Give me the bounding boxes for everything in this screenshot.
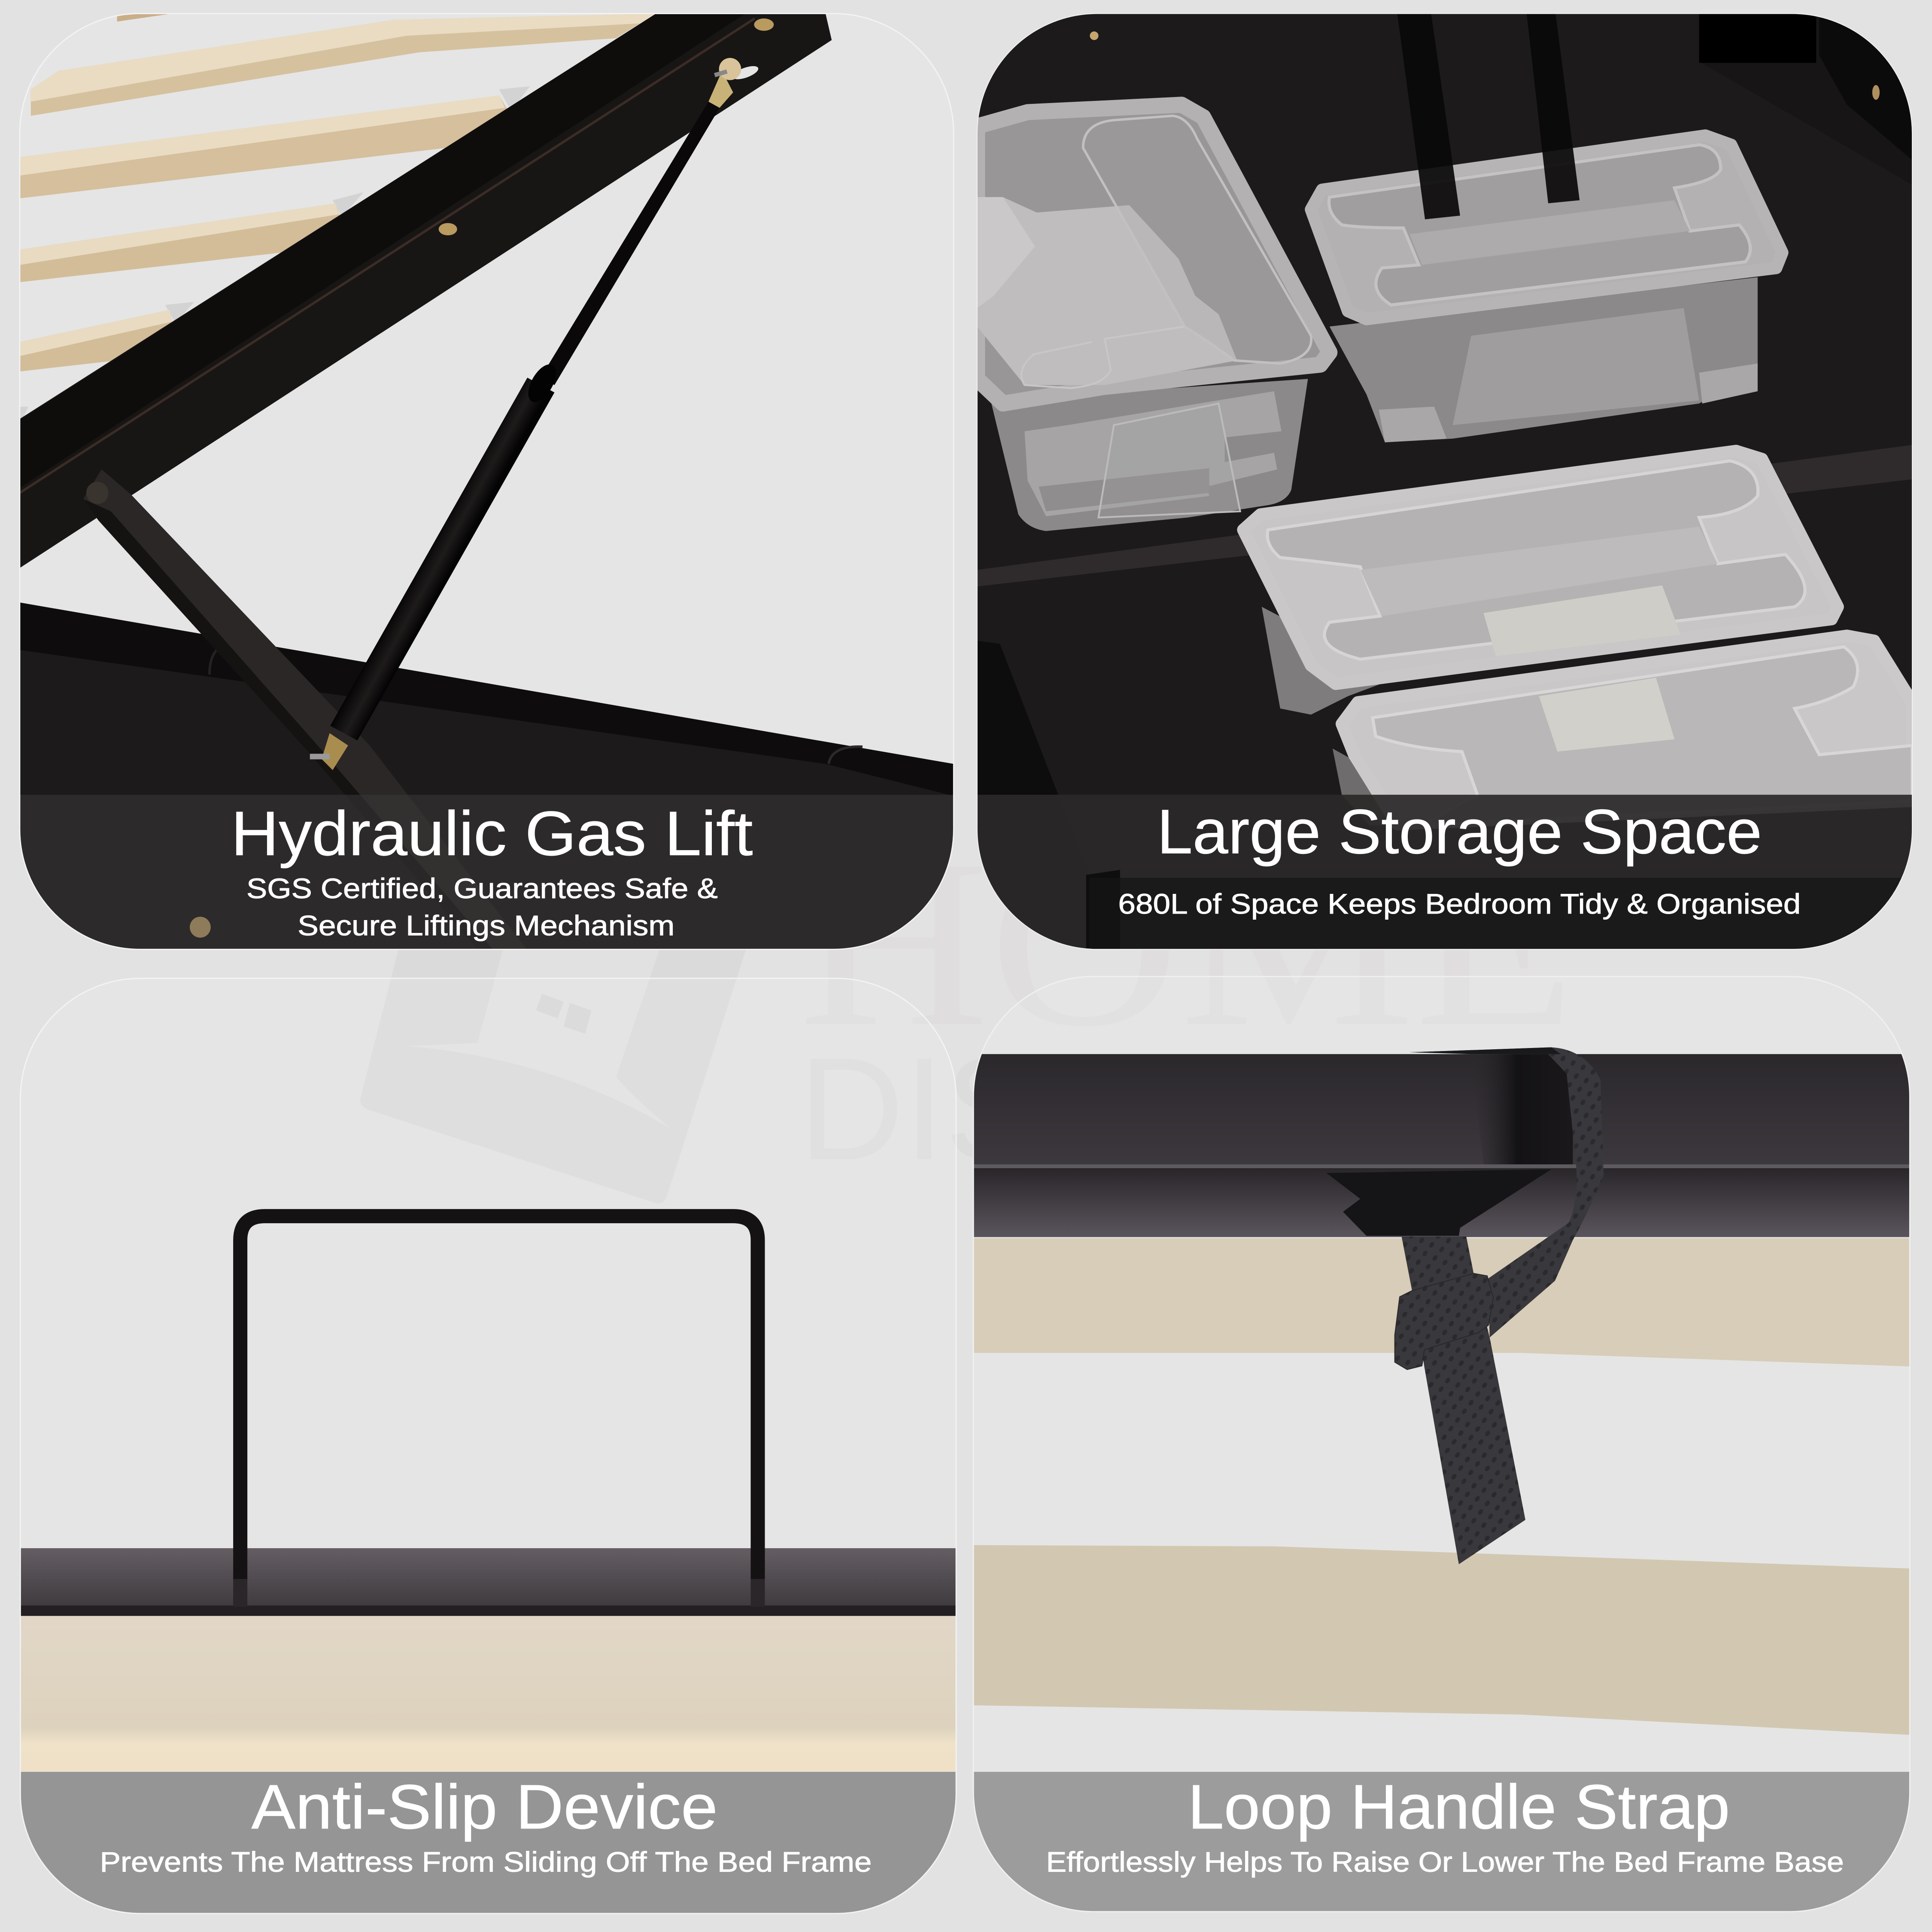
lower frame — [977, 641, 1120, 949]
frame rail upper — [973, 1054, 1910, 1165]
gas strut — [310, 58, 741, 770]
dark upper wall — [977, 14, 1912, 185]
storage box: middle — [1311, 136, 1782, 442]
watermark: brand text: HOME — [799, 810, 1576, 1076]
panel border — [20, 978, 956, 1914]
storage box: front — [1333, 636, 1912, 826]
caption band — [20, 795, 954, 949]
caption band — [977, 795, 1912, 949]
support arm — [83, 470, 407, 795]
heading: Hydraulic Gas Lift — [231, 799, 753, 869]
storage box: clothes — [977, 105, 1330, 531]
wooden slat — [20, 1616, 956, 1771]
heading: Large Storage Space — [1157, 797, 1762, 867]
wooden slat lower — [973, 1545, 1910, 1735]
frame rail highlight — [973, 1164, 1910, 1168]
base frame — [20, 602, 954, 949]
panel: anti-slip device — [20, 978, 956, 1914]
panel border — [20, 14, 954, 949]
wooden slat upper — [973, 1238, 1910, 1367]
panel: hydraulic gas lift — [20, 14, 954, 949]
storage box: lower — [1243, 451, 1838, 715]
heading: Loop Handle Strap — [1188, 1772, 1730, 1842]
anti-slip bar — [240, 1216, 758, 1607]
loop handle strap — [1395, 1047, 1604, 1564]
panel: large storage space — [977, 14, 1912, 949]
panel border — [973, 976, 1910, 1912]
watermark: brand text — [799, 810, 1576, 1191]
description: Effortlessly Helps To Raise Or Lower The Bed Frame Base — [1046, 1846, 1844, 1877]
watermark: brand text: DIS — [799, 1027, 1042, 1191]
wooden slats — [20, 14, 656, 425]
strap shadow — [1326, 1054, 1573, 1236]
top right frame corner — [1090, 14, 1912, 160]
lift posts — [1397, 14, 1580, 219]
heading: Anti-Slip Device — [251, 1772, 718, 1842]
panel border — [977, 14, 1912, 949]
caption band — [973, 1772, 1910, 1912]
side rail — [20, 1548, 956, 1616]
watermark: logo — [360, 942, 748, 1203]
description — [246, 872, 718, 941]
description: Secure Liftings Mechanism — [298, 909, 674, 941]
caption band — [20, 1772, 956, 1914]
description: Prevents The Mattress From Sliding Off The Bed Frame — [100, 1846, 872, 1877]
description: 680L of Space Keeps Bedroom Tidy & Organised — [1118, 888, 1801, 920]
cross rail — [977, 445, 1912, 586]
panel: loop handle strap — [973, 976, 1910, 1912]
lifting frame beam — [20, 14, 832, 568]
description: SGS Certified, Guarantees Safe & — [246, 872, 718, 904]
frame rail lower — [973, 1168, 1910, 1237]
floor bolt — [190, 917, 211, 938]
